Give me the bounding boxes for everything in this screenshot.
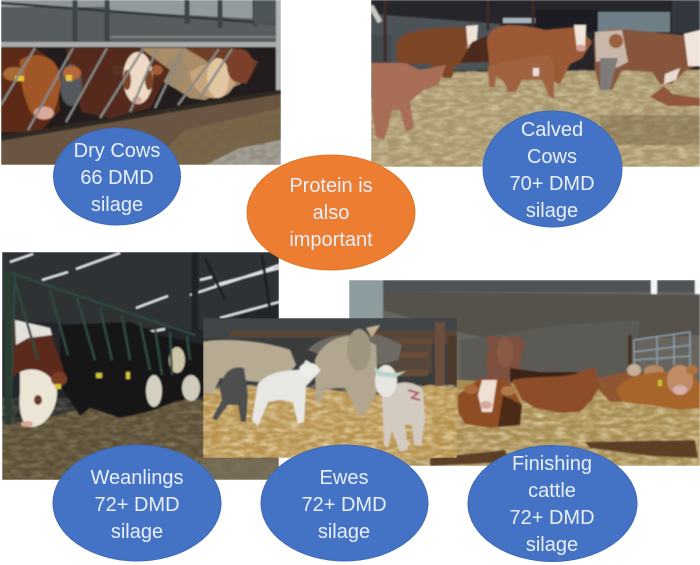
photo: calved cows on straw xyxy=(371,0,700,167)
callout: calved cows xyxy=(483,111,622,227)
cow: right lying xyxy=(616,365,700,410)
straw bedding xyxy=(398,379,700,466)
callout: calved cows: 70+ DMD xyxy=(509,173,595,195)
photo: finishing cattle bedded on straw xyxy=(349,280,700,466)
wooden fence xyxy=(230,322,457,387)
feeding trough and floor xyxy=(1,90,281,165)
callout: weanlings: 72+ DMD xyxy=(94,494,180,516)
photo: ewes and lambs xyxy=(203,318,457,458)
silage floor xyxy=(2,395,279,480)
cow: front left brown xyxy=(1,48,81,132)
photo: weanlings in shed xyxy=(2,252,279,480)
cattle: back row xyxy=(590,364,664,402)
green gate rails xyxy=(10,272,196,398)
sheep: back right ewe xyxy=(308,334,402,365)
gate xyxy=(634,332,690,368)
photo: dry cows at feed barrier xyxy=(1,0,281,165)
weanling: white faces xyxy=(146,347,200,407)
callout: ewes: Ewes xyxy=(320,467,368,489)
callout: dry cows xyxy=(54,128,180,225)
callout: ewes xyxy=(261,445,428,561)
cow: grey behind xyxy=(60,64,82,106)
cow: tan rear cows xyxy=(140,48,258,100)
callout: finishing cattle: silage xyxy=(526,534,578,556)
cow: centre red xyxy=(487,25,592,84)
cow: brown and white faced xyxy=(66,48,170,118)
calf: lying xyxy=(650,86,700,106)
callout: calved cows: silage xyxy=(526,200,578,222)
lamb: front right xyxy=(373,365,425,452)
callout: calved cows: Calved xyxy=(521,119,583,141)
callout: protein is also important: important xyxy=(289,229,373,251)
callout: weanlings: silage xyxy=(111,521,163,543)
calf: centre suckling xyxy=(488,55,554,99)
callout: dry cows: silage xyxy=(91,194,143,216)
callout: weanlings: Weanlings xyxy=(90,467,184,489)
straw bedding xyxy=(203,385,457,458)
callout: calved cows: Cows xyxy=(527,146,577,168)
callout: dry cows: 66 DMD xyxy=(80,167,154,189)
sheep: centre ewe xyxy=(315,325,380,416)
cow: brown and white patched xyxy=(594,29,700,90)
callout: dry cows: Dry Cows xyxy=(74,140,160,162)
cow: standing dark xyxy=(486,336,582,384)
lamb: dark xyxy=(212,367,248,422)
lamb: white xyxy=(252,360,321,426)
cow: front left lying xyxy=(458,378,522,428)
cow: hereford front xyxy=(5,320,67,427)
callout: ewes: 72+ DMD xyxy=(301,494,387,516)
callout: finishing cattle: Finishing xyxy=(512,453,592,475)
feed barrier bars xyxy=(1,48,232,130)
callout: finishing cattle xyxy=(468,446,637,562)
callout: ewes: silage xyxy=(318,521,370,543)
callout: weanlings xyxy=(53,445,221,561)
sheep: left ewe xyxy=(203,340,296,395)
cow: back left red xyxy=(396,25,496,78)
straw floor xyxy=(371,70,700,167)
callout: finishing cattle: cattle xyxy=(528,480,576,502)
callout: protein is also important: also xyxy=(313,202,349,224)
callout: protein is also important: Protein is xyxy=(289,175,373,197)
cow: middle lying xyxy=(512,368,600,413)
black weanlings xyxy=(60,322,205,418)
callout: finishing cattle: 72+ DMD xyxy=(509,507,595,529)
callout: protein is also important xyxy=(247,155,415,270)
calf: left standing xyxy=(371,63,446,140)
